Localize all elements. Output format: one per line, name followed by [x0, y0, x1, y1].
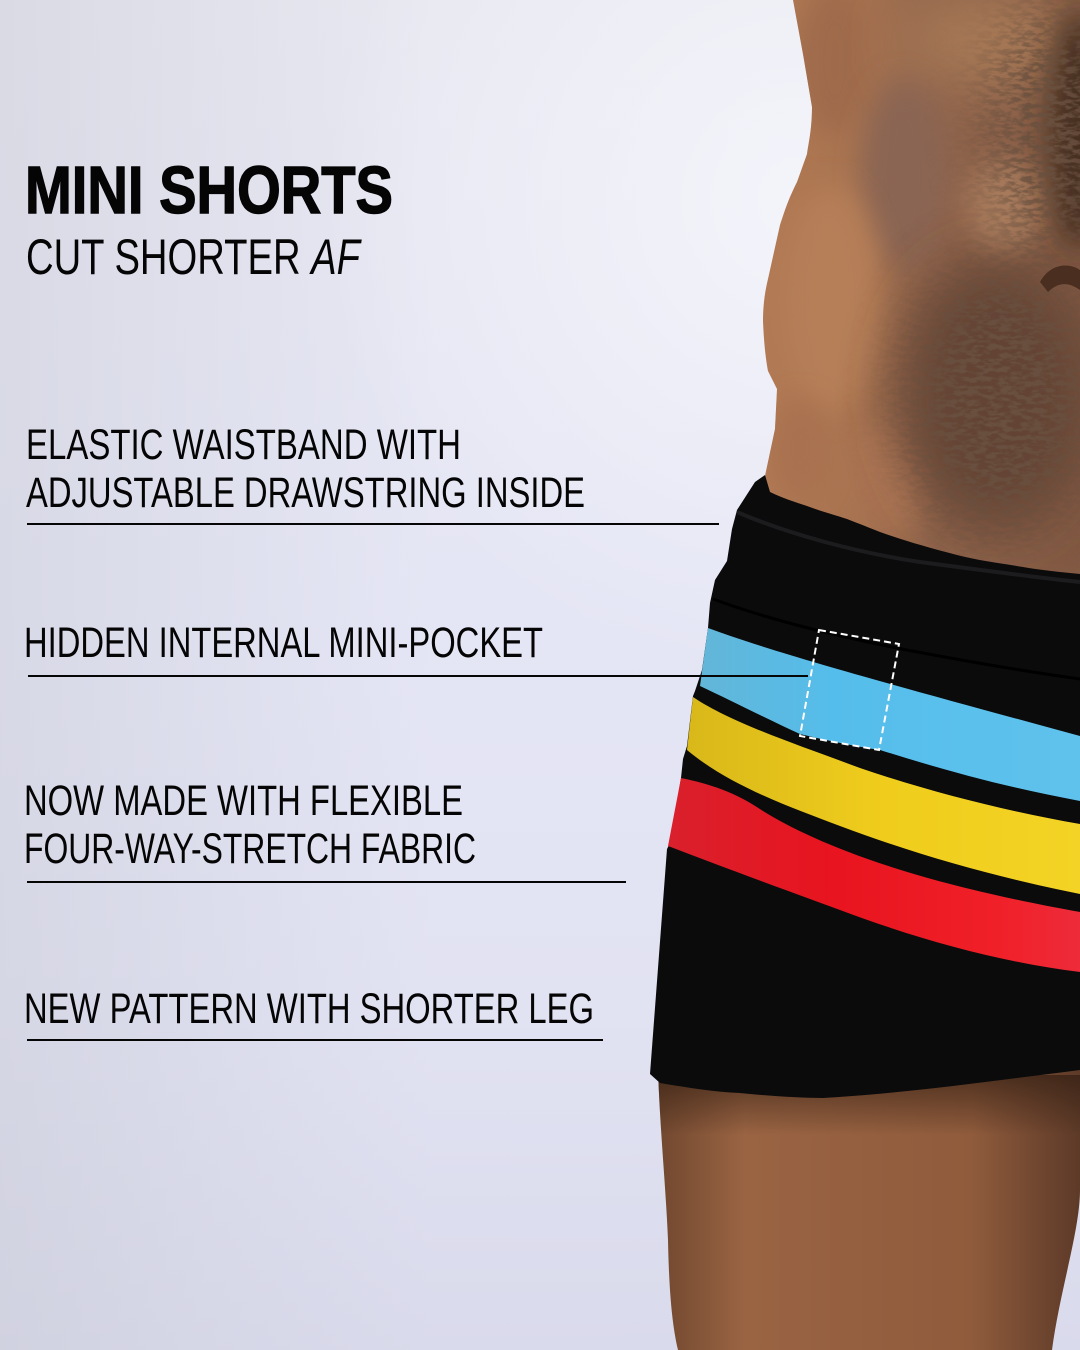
leader line: [27, 881, 626, 883]
feature text: NEW PATTERN WITH SHORTER LEG: [24, 985, 594, 1033]
feature text: ELASTIC WAISTBAND WITH: [26, 421, 461, 469]
black shorts: [650, 475, 1080, 1098]
subtitle: CUT SHORTER AF: [26, 229, 362, 285]
body hair texture: [899, 0, 1080, 505]
feature: fabric: [24, 777, 626, 883]
feature text: HIDDEN INTERNAL MINI-POCKET: [24, 619, 543, 667]
feature text: ADJUSTABLE DRAWSTRING INSIDE: [26, 469, 585, 517]
leader line: [27, 523, 719, 525]
blue stripe: [700, 628, 1080, 801]
feature: waistband: [26, 421, 719, 525]
leader line: [27, 1039, 603, 1041]
shorts body: [650, 475, 1080, 1098]
waistband gathers: [737, 512, 1080, 582]
skin light and shadow modelling: [772, 0, 1080, 542]
waistband seam: [713, 599, 1080, 679]
leader line: [28, 675, 808, 677]
red stripe: [668, 778, 1080, 972]
model torso: [755, 0, 1080, 610]
title: MINI SHORTS: [25, 153, 393, 228]
navel: [1040, 266, 1080, 292]
model leg: [650, 1060, 1080, 1350]
feature text: NOW MADE WITH FLEXIBLE: [24, 777, 463, 825]
feature text: FOUR-WAY-STRETCH FABRIC: [24, 825, 476, 873]
yellow stripe: [687, 697, 1080, 894]
hidden pocket dashed outline: [800, 630, 899, 750]
